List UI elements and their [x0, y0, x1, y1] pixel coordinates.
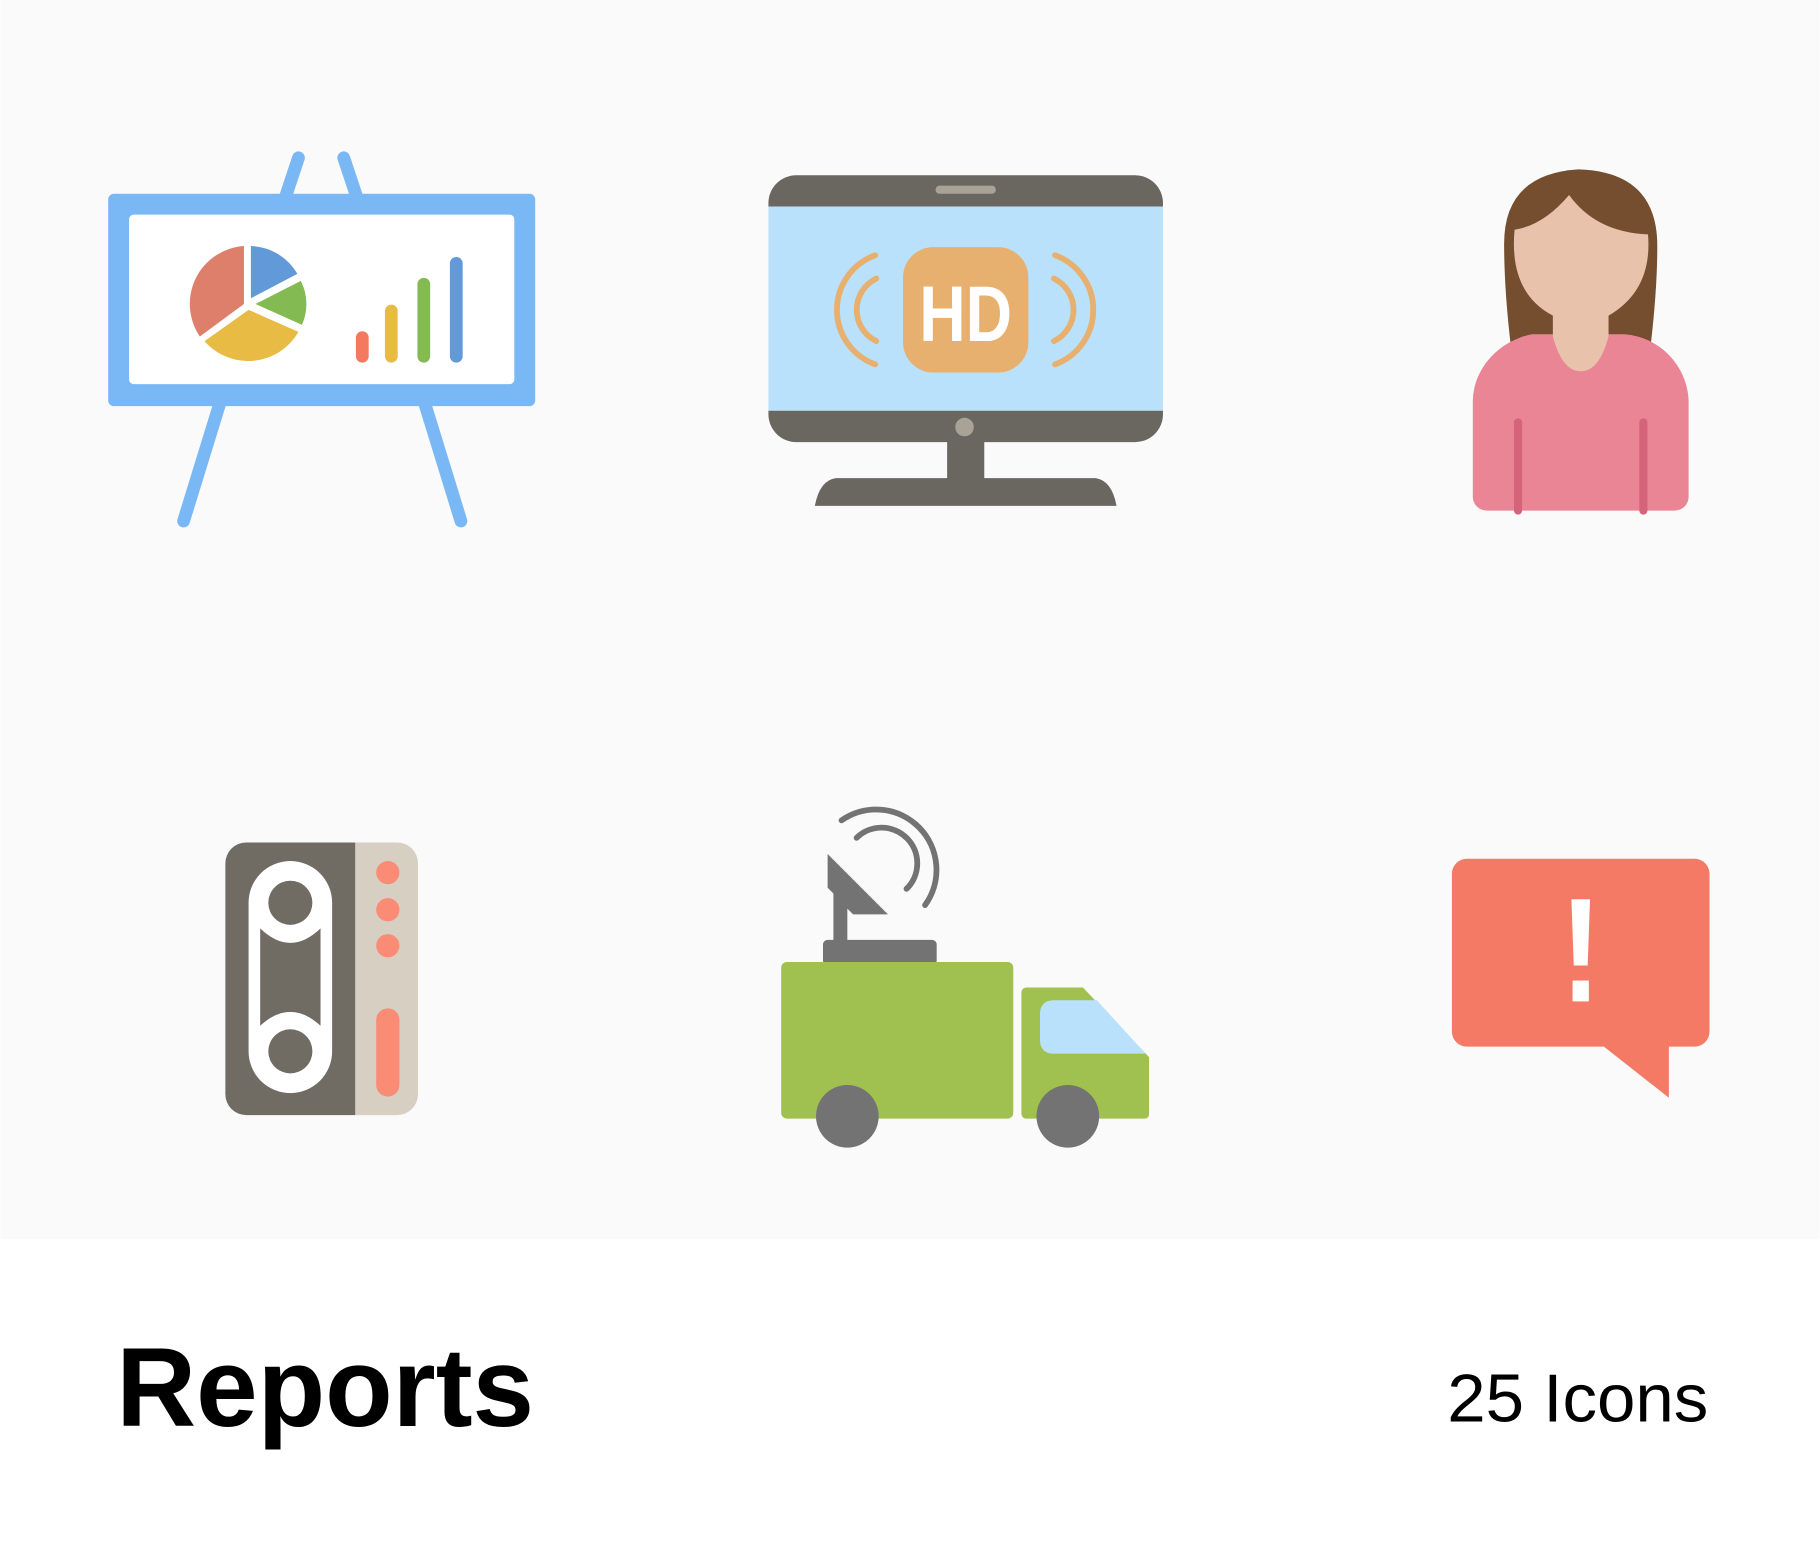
icon: cassette recorder [225, 842, 418, 1115]
icon: broadcast truck [781, 810, 1149, 1148]
title: Reports [116, 1324, 534, 1450]
icon: HD monitor [768, 175, 1163, 506]
icon: alert speech bubble [1452, 859, 1710, 1098]
icon: HD monitor: HD [919, 270, 1012, 358]
icon: presentation easel [108, 158, 535, 521]
icon count: 25 Icons [1447, 1361, 1708, 1436]
icon: woman [1473, 169, 1689, 511]
